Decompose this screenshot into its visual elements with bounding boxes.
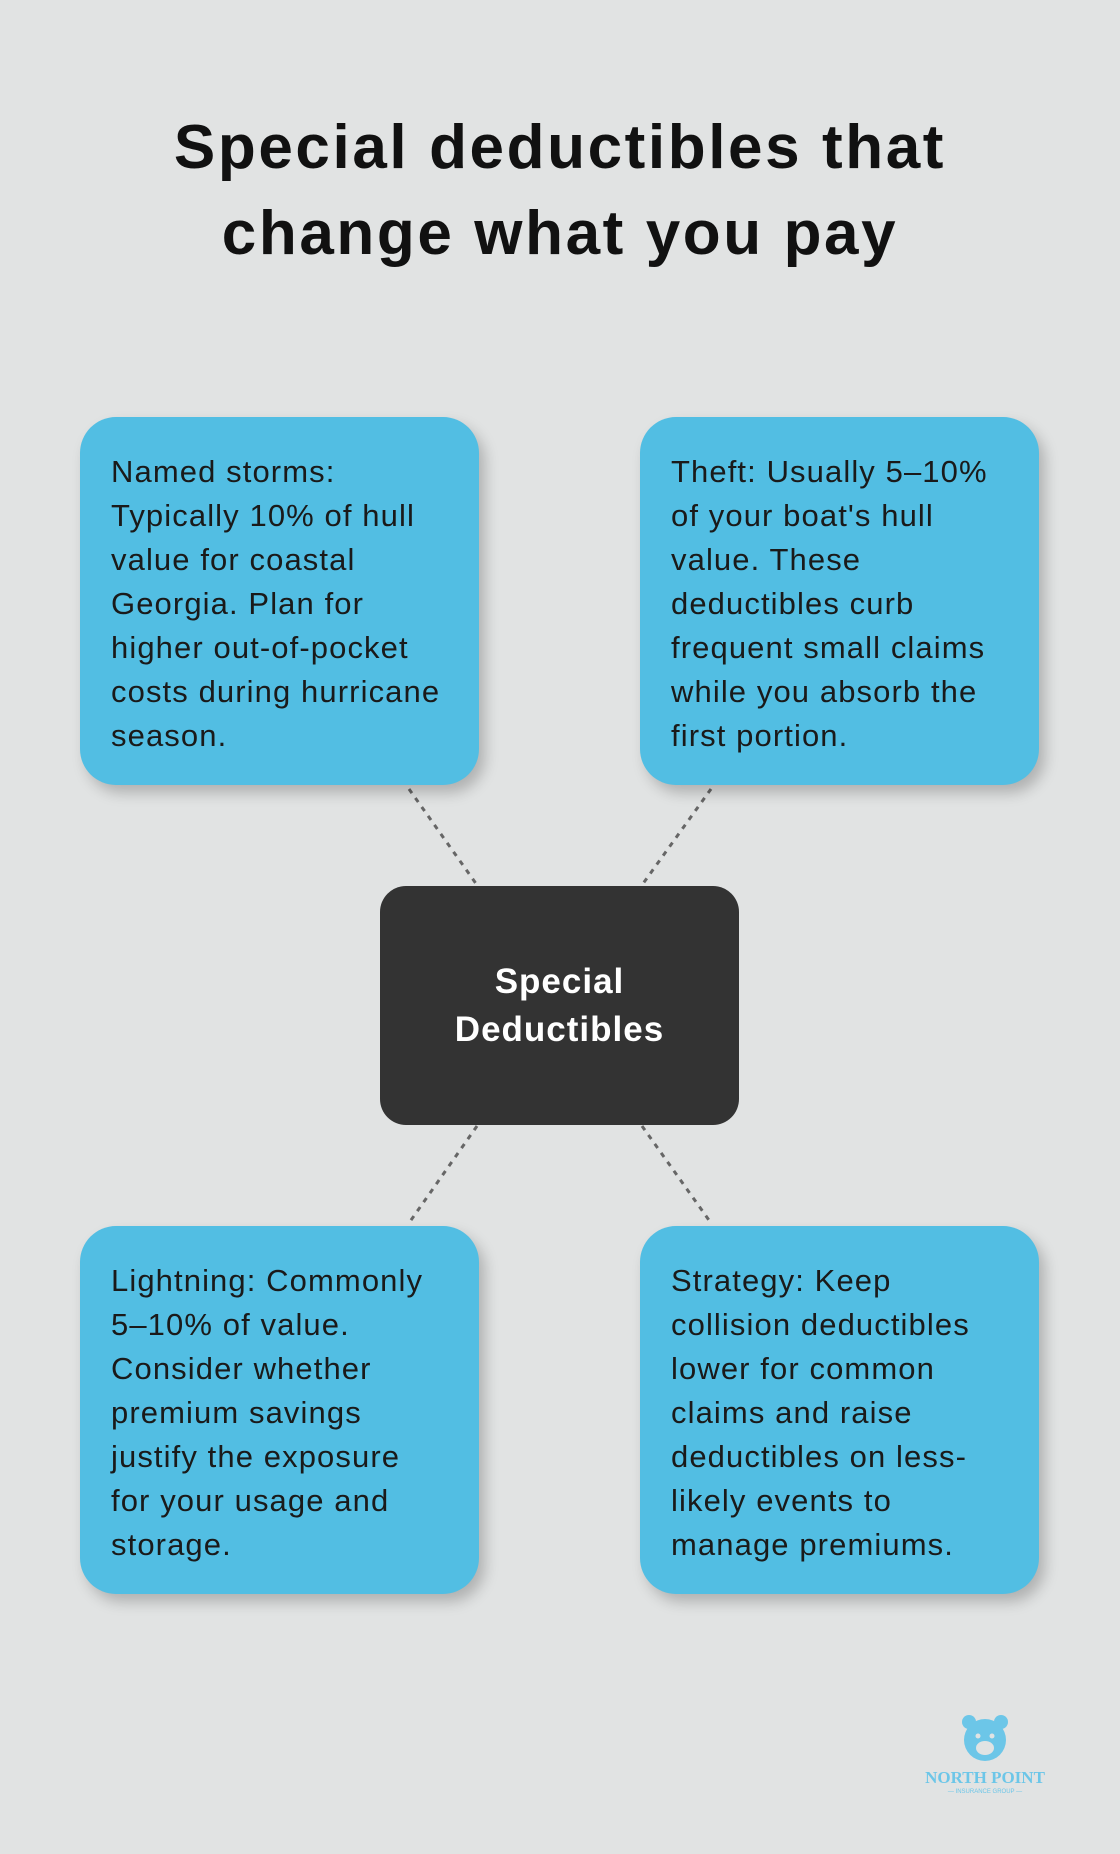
- logo: [925, 1715, 1045, 1795]
- panel: theft: [640, 417, 1039, 785]
- panel: lightning: [80, 1226, 479, 1594]
- panel: lightning: storage.: [111, 1527, 232, 1562]
- center node: [380, 886, 739, 1125]
- title: Special deductibles that: [174, 113, 946, 182]
- panel: lightning: Consider whether: [111, 1351, 372, 1386]
- panel: strategy: Strategy: Keep: [671, 1263, 891, 1298]
- logo: NORTH POINT: [925, 1768, 1045, 1787]
- panel: named storms: value for coastal: [111, 542, 355, 577]
- title: change what you pay: [222, 199, 898, 268]
- panel: lightning: 5–10% of value.: [111, 1307, 350, 1342]
- panel: strategy: claims and raise: [671, 1395, 913, 1430]
- panel: lightning: premium savings: [111, 1395, 362, 1430]
- title: [174, 113, 946, 268]
- panel: theft: Theft: Usually 5–10%: [671, 454, 988, 489]
- panel: theft: of your boat's hull: [671, 498, 934, 533]
- panel: theft: value. These: [671, 542, 861, 577]
- panel: theft: while you absorb the: [671, 674, 977, 709]
- panel: lightning: for your usage and: [111, 1483, 389, 1518]
- logo: — INSURANCE GROUP —: [948, 1789, 1022, 1795]
- panel: strategy: collision deductibles: [671, 1307, 970, 1342]
- center node: Special: [495, 962, 624, 1000]
- panel: theft: frequent small claims: [671, 630, 985, 665]
- panel: lightning: Lightning: Commonly: [111, 1263, 423, 1298]
- panel: named storms: costs during hurricane: [111, 674, 440, 709]
- panel: named storms: Typically 10% of hull: [111, 498, 415, 533]
- panel: named storms: Georgia. Plan for: [111, 586, 364, 621]
- panel: named storms: higher out-of-pocket: [111, 630, 409, 665]
- panel: named storms: Named storms:: [111, 454, 335, 489]
- panel: lightning: justify the exposure: [111, 1439, 400, 1474]
- panel: theft: first portion.: [671, 718, 848, 753]
- panel: theft: deductibles curb: [671, 586, 914, 621]
- panel: strategy: likely events to: [671, 1483, 892, 1518]
- panel: strategy: manage premiums.: [671, 1527, 954, 1562]
- panel: named storms: season.: [111, 718, 227, 753]
- panel: named storms: [80, 417, 479, 785]
- center node: Deductibles: [455, 1010, 664, 1048]
- panel: strategy: deductibles on less-: [671, 1439, 967, 1474]
- panel: strategy: [640, 1226, 1039, 1594]
- panel: strategy: lower for common: [671, 1351, 935, 1386]
